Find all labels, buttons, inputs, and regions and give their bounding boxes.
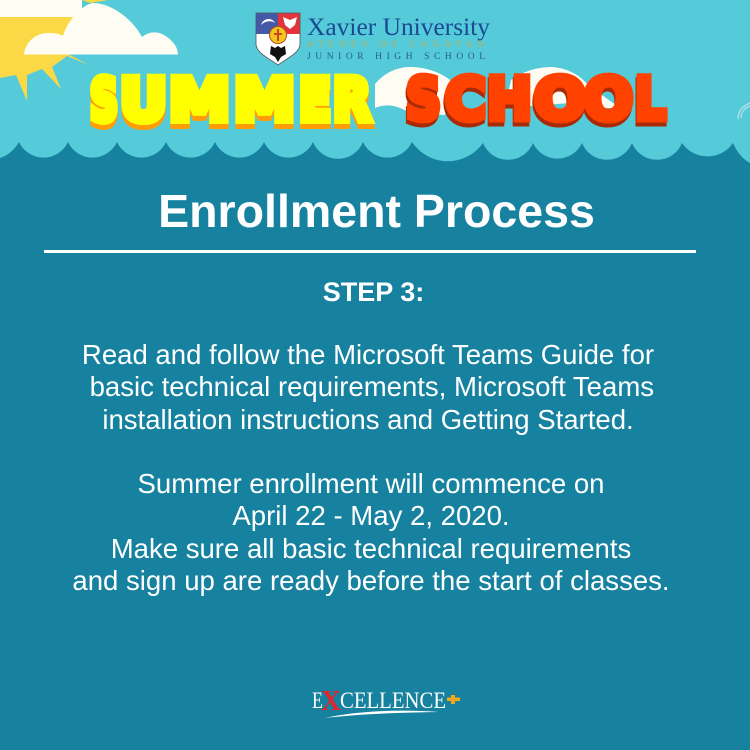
wordmark: SCHOOL: C	[444, 69, 485, 137]
enrollment dates and reminder: and sign up are ready before the start of classes.	[72, 565, 670, 596]
wordmark: SUMMER	[90, 66, 371, 139]
icon: sun	[0, 0, 108, 101]
step instructions: Read and follow the Microsoft Teams Guide for	[82, 339, 654, 370]
university subtitle: ATENEO DE CAGAYAN	[307, 39, 484, 49]
wordmark: SCHOOL: S	[406, 65, 441, 133]
wordmark: SCHOOL: S	[405, 69, 440, 137]
wordmark: SUMMER: S	[90, 66, 118, 134]
enrollment dates and reminder: Summer enrollment will commence on	[138, 468, 604, 499]
wordmark: SUMMER: E	[299, 66, 331, 134]
wordmark: SUMMER: M	[234, 71, 295, 139]
university name: Xavier University	[307, 12, 490, 41]
school division: JUNIOR HIGH SCHOOL	[307, 52, 485, 62]
wordmark: SUMMER: R	[333, 66, 371, 134]
sky and scalloped wave edge	[0, 0, 750, 163]
wordmark: SCHOOL	[405, 65, 666, 137]
wordmark: SUMMER: M	[169, 66, 230, 134]
icon: distant swirl	[738, 103, 750, 119]
wordmark: SUMMER: M	[169, 71, 230, 139]
icon: clouds behind school wordmark	[375, 67, 620, 115]
footer logo: Excellence+: E	[312, 688, 323, 713]
wordmark: SCHOOL: H	[486, 69, 531, 137]
icon: university crest	[256, 13, 300, 65]
wordmark: SCHOOL: O	[584, 65, 633, 133]
footer logo: Excellence+: X	[321, 686, 341, 717]
header banner	[0, 0, 750, 163]
step instructions	[82, 339, 654, 435]
wordmark: SCHOOL: H	[487, 65, 532, 133]
icon: cloud left	[0, 0, 178, 54]
wordmark: SCHOOL: C	[445, 65, 486, 133]
wordmark: SCHOOL: L	[634, 69, 665, 137]
wordmark: SCHOOL: O	[583, 69, 632, 137]
footer logo: Excellence+: CELLENCE	[340, 688, 446, 713]
step heading: STEP 3:	[323, 277, 424, 307]
wordmark: SUMMER: U	[120, 71, 167, 139]
wordmark: SUMMER: M	[234, 66, 295, 134]
enrollment dates and reminder	[72, 468, 670, 596]
wordmark: SCHOOL: O	[534, 65, 586, 133]
step instructions: basic technical requirements, Microsoft Teams	[90, 371, 654, 402]
step instructions: installation instructions and Getting Started.	[102, 404, 634, 435]
title: Enrollment Process	[158, 185, 595, 237]
wordmark: SUMMER: R	[333, 71, 371, 139]
wordmark: SUMMER: U	[120, 66, 167, 134]
wordmark: SUMMER: E	[299, 71, 331, 139]
wordmark: SCHOOL: O	[533, 69, 585, 137]
enrollment dates and reminder: Make sure all basic technical requirements	[111, 533, 631, 564]
title rule	[44, 250, 696, 253]
wordmark: SCHOOL: L	[635, 65, 666, 133]
enrollment dates and reminder: April 22 - May 2, 2020.	[232, 500, 510, 531]
wordmark: SUMMER: S	[90, 71, 118, 139]
